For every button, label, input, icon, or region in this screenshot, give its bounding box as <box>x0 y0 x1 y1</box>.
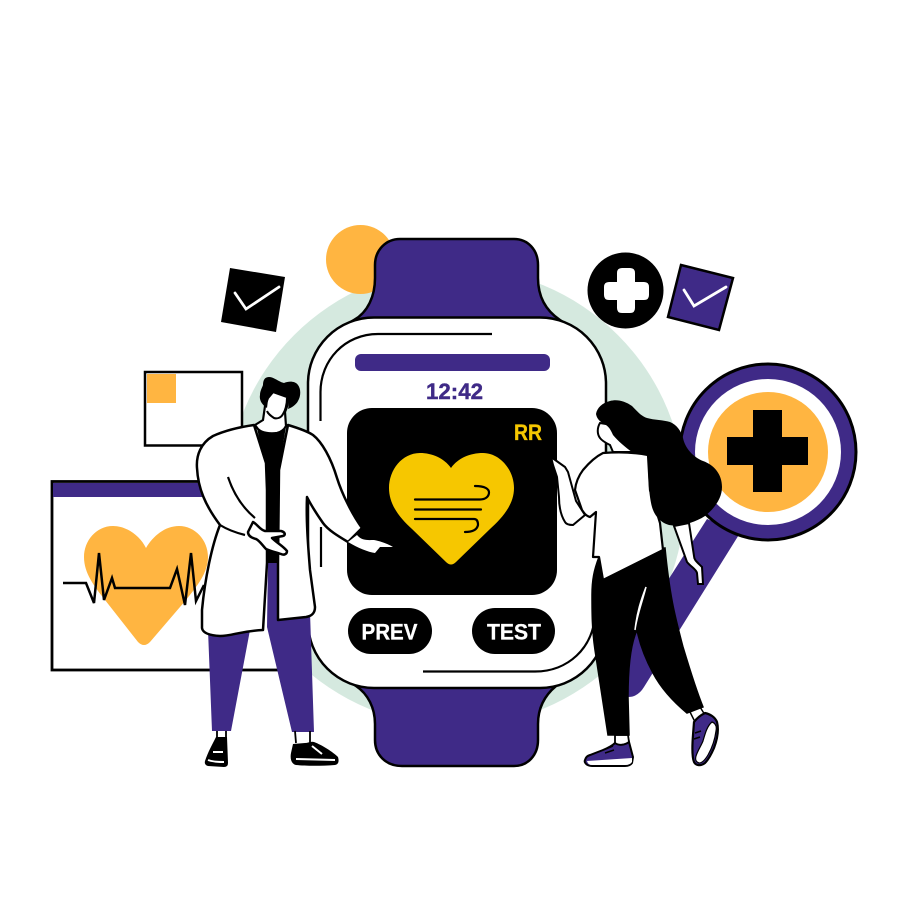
woman's left shoe <box>585 735 633 766</box>
trousers <box>592 548 703 735</box>
watch strap bottom <box>356 686 556 766</box>
jaw line <box>267 398 287 418</box>
man's open hand <box>248 522 287 555</box>
lab coat left <box>197 425 267 636</box>
wind icon <box>415 486 489 532</box>
plus badge <box>588 252 664 328</box>
small card <box>145 372 242 446</box>
TEST button <box>472 608 555 654</box>
watch screen <box>347 408 557 595</box>
background green circle <box>227 268 685 726</box>
man's left shoe <box>205 731 228 767</box>
magnifier handle <box>620 519 740 697</box>
black cross <box>727 410 808 492</box>
time: 12:42 <box>426 379 483 404</box>
heart-rate card <box>52 482 292 670</box>
PREV button: PREV <box>362 620 418 644</box>
hair <box>260 377 300 409</box>
face <box>598 423 634 452</box>
black check box <box>221 268 285 332</box>
shirt <box>257 426 286 563</box>
trouser gap <box>635 587 646 630</box>
trousers <box>208 560 314 732</box>
lab coat right <box>278 425 362 620</box>
status bar <box>355 354 550 371</box>
purple check box <box>668 265 733 330</box>
magnifier <box>680 364 856 540</box>
t-shirt <box>575 452 663 580</box>
pointing arm <box>551 457 585 525</box>
sleeve crease <box>220 477 255 535</box>
man in lab coat <box>197 377 393 767</box>
yellow heart <box>389 453 514 564</box>
orange circle <box>326 225 395 294</box>
woman's right shoe <box>690 707 718 765</box>
watch body <box>308 318 606 688</box>
orange heart <box>84 526 208 645</box>
ECG line <box>63 553 204 605</box>
neck and face <box>255 392 288 433</box>
man's pointing hand <box>348 535 393 553</box>
RR label: RR <box>514 420 542 445</box>
man's right shoe <box>291 731 339 766</box>
PREV button <box>348 608 432 654</box>
woman <box>551 400 722 766</box>
watch strap top <box>354 239 560 320</box>
long hair <box>596 400 722 526</box>
far arm <box>674 523 703 584</box>
TEST button: TEST <box>487 620 541 644</box>
